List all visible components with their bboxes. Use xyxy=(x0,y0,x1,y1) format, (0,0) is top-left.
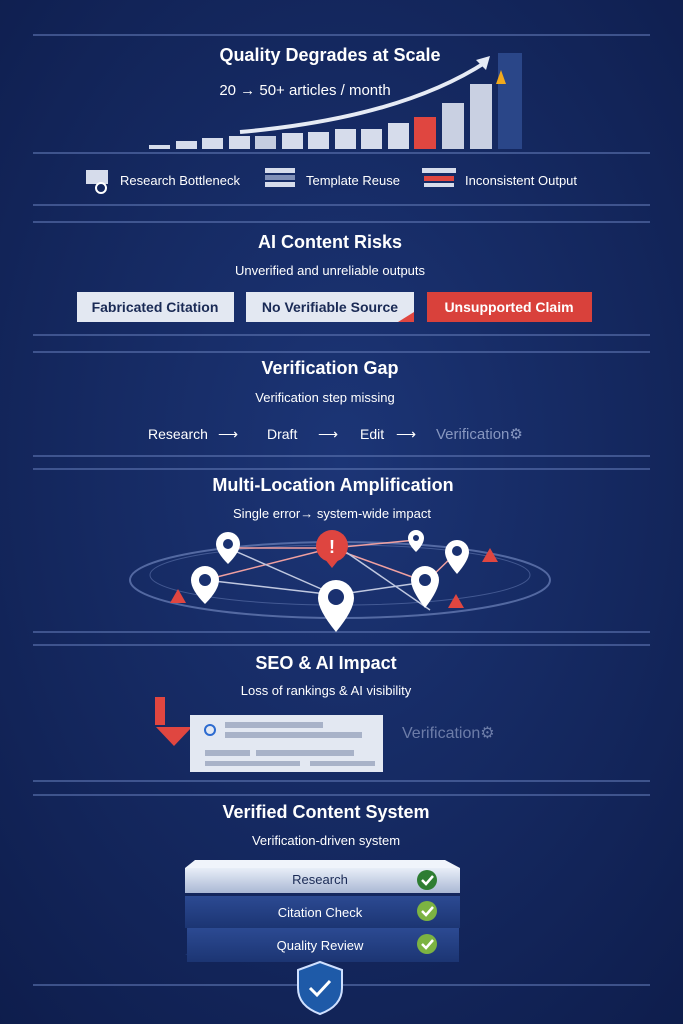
icon row: problems: Inconsistent Output xyxy=(465,173,577,188)
title: AI Content Risks: AI Content Risks xyxy=(258,232,402,252)
layered stack: Quality Review xyxy=(277,938,364,953)
search result card with red arrow xyxy=(155,697,495,772)
subtitle: Loss of rankings & AI visibility xyxy=(241,683,412,698)
subtitle: unverified outputs: Unverified and unreliable outputs xyxy=(235,263,426,278)
process flow: ⟶ xyxy=(396,426,416,442)
bar chart xyxy=(149,53,522,149)
process flow: ⟶ xyxy=(218,426,238,442)
process flow: Research xyxy=(148,426,208,442)
tags: risks: Unsupported Claim xyxy=(444,299,574,315)
layered stack: Research xyxy=(292,872,348,887)
process flow: ⟶ xyxy=(318,426,338,442)
icon: shield check xyxy=(298,962,342,1014)
subtitle: Single error→ system-wide impact xyxy=(233,506,431,521)
process flow xyxy=(148,426,523,443)
tags: risks: Fabricated Citation xyxy=(92,299,218,315)
title: Verified Content System: Verified Content System xyxy=(222,802,430,822)
search result card with red arrow: Verification⚙ xyxy=(402,725,495,742)
layered stack xyxy=(185,860,460,962)
icon row: problems: Research Bottleneck xyxy=(120,173,240,188)
subtitle: articles per month: 20 → 50+ articles / month xyxy=(219,82,391,99)
subtitle: Verification-driven system xyxy=(252,833,400,848)
layered stack: Citation Check xyxy=(278,905,363,920)
process flow: Verification⚙ xyxy=(436,426,523,443)
title: Verification Gap: Verification Gap xyxy=(261,358,399,378)
icon row: problems xyxy=(86,168,577,193)
process flow: Draft xyxy=(267,426,297,442)
map network: ! xyxy=(329,537,335,557)
title: Multi-Location Amplification: Multi-Location Amplification xyxy=(212,475,454,495)
icon row: problems: Template Reuse xyxy=(306,173,400,188)
title: SEO & AI Impact: SEO & AI Impact xyxy=(255,653,397,673)
subtitle: Verification step missing xyxy=(255,390,395,405)
tags: risks xyxy=(77,292,592,322)
process flow: Edit xyxy=(360,426,384,442)
title: Quality Degrades at Scale: Quality Degrades at Scale xyxy=(219,45,441,65)
map network xyxy=(130,530,550,632)
tags: risks: No Verifiable Source xyxy=(262,299,398,315)
